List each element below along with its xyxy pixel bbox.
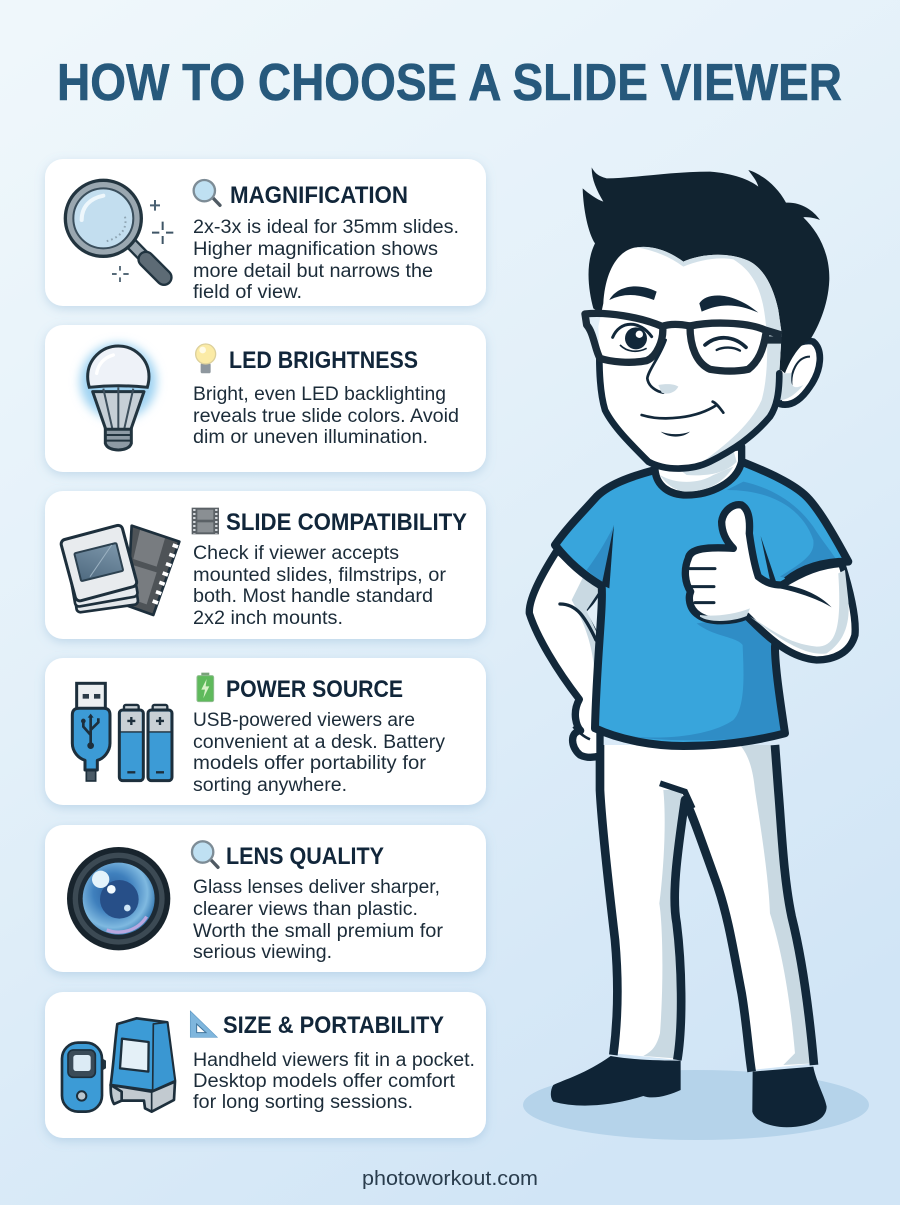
ear: [775, 341, 820, 405]
body text: Bright, even LED backlighting: [193, 384, 446, 405]
character: winking man with thumbs up: [523, 167, 869, 1140]
icon: camera lens: [67, 847, 170, 950]
icon: handheld and desktop viewers: [62, 1018, 175, 1112]
icon: slides and filmstrip: [60, 524, 179, 615]
body text: Desktop models offer comfort: [193, 1071, 456, 1092]
panel: power source: [45, 658, 486, 805]
body text: Handheld viewers fit in a pocket.: [193, 1050, 475, 1071]
heading: SIZE & PORTABILITY: [223, 1012, 444, 1039]
heading: SLIDE COMPATIBILITY: [226, 509, 467, 536]
heading: LED BRIGHTNESS: [229, 347, 418, 374]
smile: [642, 402, 723, 418]
body text: clearer views than plastic.: [193, 899, 418, 920]
icon: small magnifier: [192, 841, 218, 867]
panel: slide compatibility: [45, 491, 486, 639]
footer url: photoworkout.com: [362, 1168, 538, 1190]
icon: light bulb: [80, 343, 157, 450]
body text: dim or uneven illumination.: [193, 427, 428, 448]
body text: 2x2 inch mounts.: [193, 608, 343, 629]
icon: small ruler triangle: [190, 1011, 217, 1037]
body text: [193, 710, 446, 796]
nose: [647, 340, 666, 393]
body text: [193, 384, 459, 448]
body text: for long sorting sessions.: [193, 1092, 413, 1113]
icon: USB plug and batteries: [72, 683, 172, 781]
left arm: [529, 447, 855, 757]
panel: magnification: [45, 159, 486, 306]
heading: POWER SOURCE: [226, 676, 403, 703]
right arm and thumbs-up hand: [685, 505, 855, 660]
winking eye: [705, 338, 746, 347]
glasses: [585, 313, 782, 371]
body text: [193, 543, 447, 629]
heading: LENS QUALITY: [226, 843, 384, 870]
legs and shoes: [551, 745, 827, 1127]
icon: magnifying glass: [65, 180, 173, 282]
head: [583, 167, 829, 469]
icon: small battery: [197, 673, 214, 702]
body text: Glass lenses deliver sharper,: [193, 877, 440, 898]
body text: [193, 217, 459, 303]
body text: mounted slides, filmstrips, or: [193, 565, 447, 586]
heading: MAGNIFICATION: [230, 182, 408, 209]
body text: field of view.: [193, 282, 302, 303]
body text: Worth the small premium for: [193, 921, 444, 942]
body text: convenient at a desk. Battery: [193, 732, 446, 753]
face: [598, 247, 782, 469]
hair: [583, 167, 829, 373]
body text: serious viewing.: [193, 942, 332, 963]
body text: models offer portability for: [193, 753, 427, 774]
body text: sorting anywhere.: [193, 775, 347, 796]
body text: Higher magnification shows: [193, 239, 438, 260]
neck: [655, 447, 742, 495]
body text: both. Most handle standard: [193, 586, 433, 607]
body text: Check if viewer accepts: [193, 543, 399, 564]
icon: small magnifier: [194, 180, 220, 205]
icon: small bulb: [196, 344, 216, 373]
panel: lens quality: [45, 825, 486, 972]
body text: [193, 877, 444, 963]
icon: small film: [192, 508, 219, 534]
body text: 2x-3x is ideal for 35mm slides.: [193, 217, 459, 238]
ground shadow: [523, 1070, 869, 1140]
body text: reveals true slide colors. Avoid: [193, 406, 459, 427]
shirt: [555, 462, 848, 746]
body text: more detail but narrows the: [193, 261, 433, 282]
eyebrows: [609, 286, 657, 300]
body text: USB-powered viewers are: [193, 710, 415, 731]
panel: size and portability: [45, 992, 486, 1138]
open eye: [613, 324, 652, 337]
panel: LED brightness: [45, 325, 486, 472]
body text: [193, 1050, 475, 1113]
